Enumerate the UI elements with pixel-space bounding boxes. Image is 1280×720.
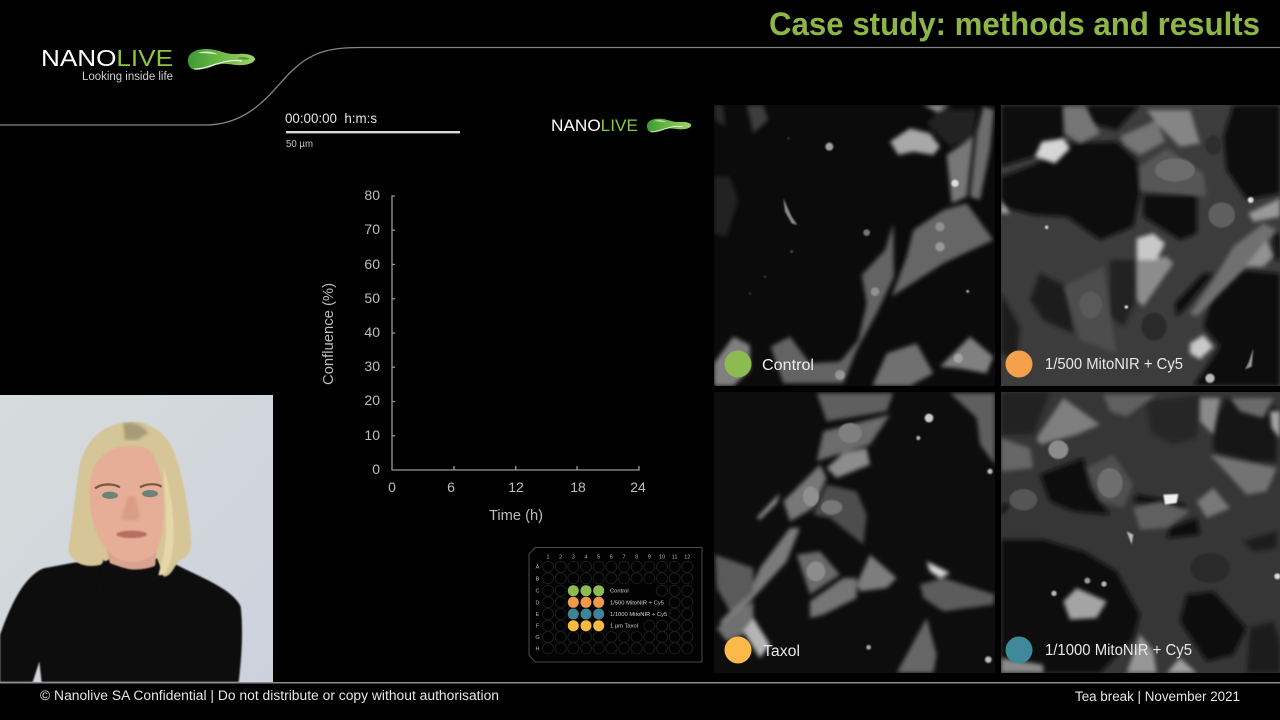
micrograph: taxol <box>714 392 995 673</box>
well legend labels: 1/500 MitoNIR + Cy5 <box>610 600 664 606</box>
hair shadow on top <box>123 423 148 440</box>
x axis labels: 6 <box>447 479 455 495</box>
wordmark: NANOLIVE <box>551 117 638 135</box>
row letters: C <box>536 589 540 595</box>
face <box>89 446 164 562</box>
footer date: Tea break | November 2021 <box>1075 689 1240 704</box>
x axis title: Time (h) <box>489 507 543 524</box>
panel: 1/1000 MitoNIR + Cy5 cells <box>1001 392 1280 673</box>
footer confidentiality note: © Nanolive SA Confidential | Do not distribute or copy without authorisation <box>40 688 499 703</box>
row letters <box>535 565 540 652</box>
time stamp: 00:00:00 h:m:s <box>285 110 377 126</box>
y axis labels <box>364 187 380 477</box>
mouth <box>116 531 147 538</box>
x axis labels: 18 <box>570 479 586 495</box>
x axis labels: 12 <box>508 479 524 495</box>
nose <box>121 497 140 521</box>
column numbers: 12 <box>684 554 690 560</box>
marker: taxol <box>724 636 752 664</box>
sweater <box>0 558 242 682</box>
column numbers: 9 <box>648 554 651 560</box>
column numbers: 10 <box>659 554 665 560</box>
row letters: A <box>536 565 540 571</box>
scale label: 50 µm <box>286 138 313 150</box>
column numbers: 1 <box>546 554 550 560</box>
axes <box>392 196 639 470</box>
x axis labels: 0 <box>388 479 396 495</box>
column numbers: 5 <box>597 554 600 560</box>
label: taxol: Taxol <box>763 643 800 660</box>
well legend labels: Control <box>610 589 629 595</box>
time stamp and scale bar <box>285 110 460 150</box>
row letters: B <box>536 576 540 582</box>
y axis labels: 0 <box>372 461 380 477</box>
micrograph: control <box>714 105 995 386</box>
row letters: E <box>536 612 540 618</box>
filled wells: 1/500 MitoNIR <box>568 597 604 608</box>
title: Case study: methods and results <box>769 6 1260 42</box>
column numbers: 2 <box>559 554 562 560</box>
column numbers: 3 <box>572 554 575 560</box>
column numbers: 11 <box>672 554 678 560</box>
filled wells: 1/1000 MitoNIR <box>568 608 604 620</box>
plate outline <box>529 548 702 662</box>
empty wells <box>542 561 693 654</box>
y axis labels: 10 <box>364 427 380 443</box>
marker: 1/500 <box>1006 350 1032 378</box>
well legend labels: 1/1000 MitoNIR + Cy5 <box>610 612 667 618</box>
x axis labels: 24 <box>630 479 646 495</box>
column numbers: 6 <box>610 554 613 560</box>
ribbon icon <box>647 119 691 132</box>
Nanolive logo <box>41 45 255 83</box>
panel: taxol cells <box>714 392 995 673</box>
y axis labels: 30 <box>364 358 380 374</box>
row letters: D <box>536 600 540 606</box>
column numbers: 8 <box>635 554 638 560</box>
x axis labels <box>388 479 646 495</box>
front hair strand <box>158 467 174 575</box>
y axis labels: 50 <box>364 290 380 306</box>
logo icon: green ribbon <box>188 49 255 70</box>
neck <box>107 550 157 572</box>
y axis labels: 60 <box>364 256 380 272</box>
y axis labels: 80 <box>364 187 380 203</box>
label: 1/500: 1/500 MitoNIR + Cy5 <box>1045 356 1183 373</box>
hair <box>68 422 191 577</box>
micrograph: 1/1000 MitoNIR <box>1001 392 1280 673</box>
tagline: Looking inside life <box>82 71 173 83</box>
label: 1/1000: 1/1000 MitoNIR + Cy5 <box>1045 642 1192 659</box>
presenter video <box>0 395 273 682</box>
well legend labels <box>610 589 667 630</box>
well legend labels: 1 µm Taxol <box>610 624 638 630</box>
filled wells: control <box>568 585 604 596</box>
scale bar <box>286 131 460 133</box>
column numbers <box>546 554 690 560</box>
micrograph: 1/500 MitoNIR <box>1001 105 1280 386</box>
logo wordmark: NANO LIVE <box>41 45 173 71</box>
secondary Nanolive logo <box>551 117 691 135</box>
panel: control cells <box>714 105 995 386</box>
chart: confluence over time <box>320 187 646 524</box>
collar <box>102 559 164 578</box>
marker: control <box>724 350 752 378</box>
column numbers: 7 <box>622 554 626 560</box>
y axis labels: 20 <box>364 392 380 408</box>
row letters: F <box>536 624 540 630</box>
well plate legend <box>529 548 702 662</box>
label: control: Control <box>762 357 814 374</box>
header curve line <box>0 48 1280 125</box>
y axis title: Confluence (%) <box>320 283 337 385</box>
footer <box>40 688 1240 704</box>
y axis labels: 70 <box>364 221 380 237</box>
panel: 1/500 MitoNIR + Cy5 cells <box>1001 105 1280 386</box>
photo bottom border <box>0 682 1280 684</box>
row letters: H <box>536 646 540 652</box>
column numbers: 4 <box>584 554 588 560</box>
marker: 1/1000 <box>1006 636 1032 664</box>
y axis labels: 40 <box>364 324 380 340</box>
wall background <box>0 395 273 682</box>
eyes and brows <box>95 484 162 499</box>
filled wells: taxol <box>568 620 604 631</box>
row letters: G <box>535 635 540 641</box>
